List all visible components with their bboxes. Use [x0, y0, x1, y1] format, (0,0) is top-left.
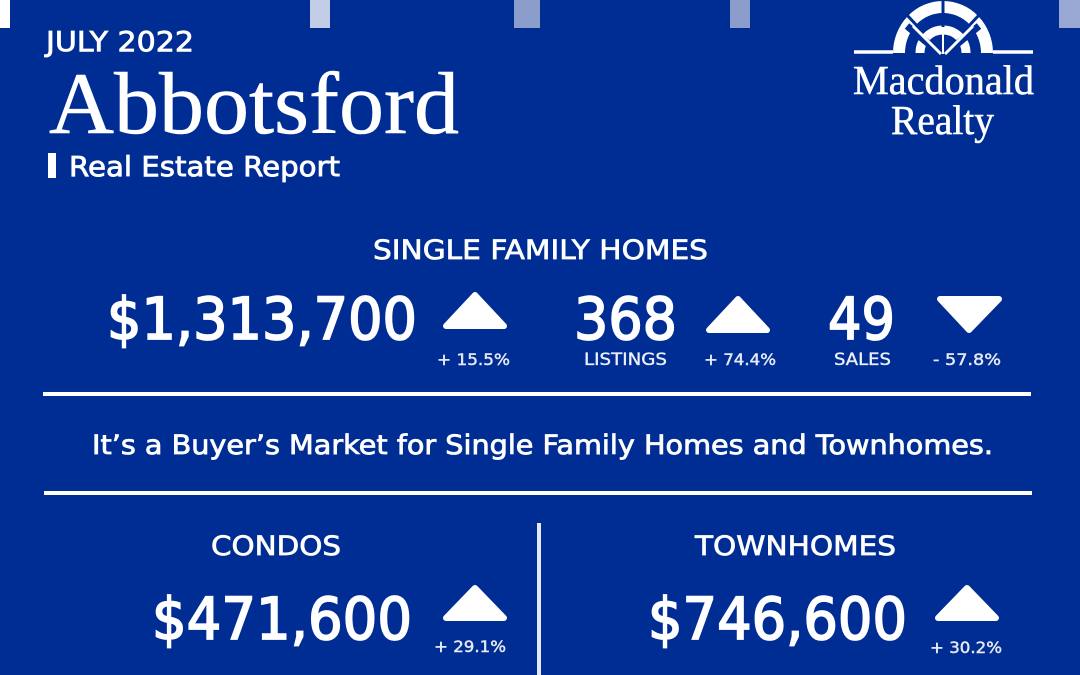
sales stat: 49	[828, 285, 895, 353]
condo price stat: + 29.1%	[434, 637, 506, 656]
logo: Macdonald Realty	[853, 0, 1034, 103]
townhome price stat: + 30.2%	[930, 638, 1002, 657]
panel: condos	[152, 531, 506, 656]
heading: SINGLE FAMILY HOMES	[373, 235, 708, 266]
panel: townhomes	[648, 531, 1002, 657]
subtitle with marker: Real Estate Report	[69, 150, 340, 183]
logo wordmark second line: Realty	[891, 97, 994, 143]
townhome price stat: $746,600	[648, 585, 907, 653]
market statement: It’s a Buyer’s Market for Single Family Homes and Townhomes.	[92, 430, 993, 461]
logo emblem	[854, 0, 1033, 54]
section: single family homes	[107, 235, 1001, 370]
listings stat: LISTINGS	[584, 350, 667, 370]
benchmark price stat: + 15.5%	[437, 350, 510, 369]
condo price stat: $471,600	[152, 585, 412, 653]
sales stat: - 57.8%	[933, 350, 1001, 369]
date heading: JULY 2022	[44, 25, 194, 58]
heading: CONDOS	[211, 531, 341, 562]
sales stat: SALES	[834, 350, 891, 370]
logo wordmark: Macdonald	[853, 57, 1034, 103]
top colour strip	[0, 0, 1080, 28]
listings stat: + 74.4%	[704, 350, 776, 369]
benchmark price stat	[107, 285, 510, 369]
listings stat: 368	[574, 285, 677, 353]
benchmark price stat: $1,313,700	[107, 285, 417, 353]
heading: TOWNHOMES	[694, 531, 896, 562]
sales stat	[828, 285, 1001, 370]
title: Abbotsford	[49, 56, 459, 153]
listings stat	[574, 285, 776, 370]
